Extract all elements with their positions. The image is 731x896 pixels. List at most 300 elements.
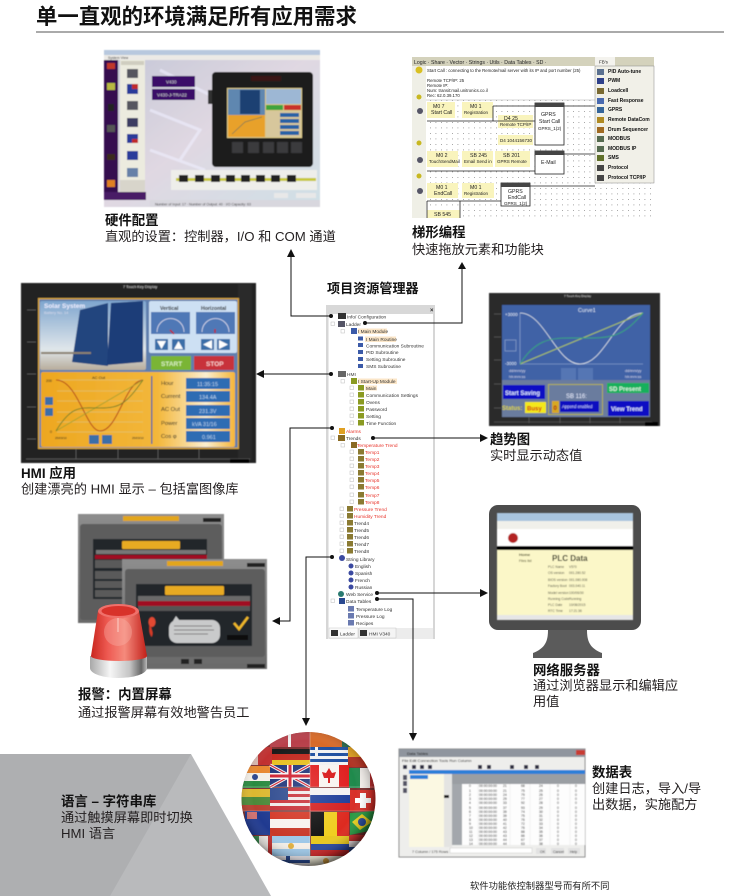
panel: ladder programming screenshot: PID Auto-tune [608, 69, 641, 75]
panel: ladder programming screenshot: Remote TCP/IP: 25 [427, 78, 465, 83]
panel: project explorer tree: Web Service [346, 592, 373, 598]
text: hardware configuration: 硬件配置 [105, 213, 159, 228]
panel: HMI application screenshot: 25/03/10 [55, 436, 67, 440]
panel: data tables screenshot: 00:00:00:00 [479, 842, 497, 846]
panel: ladder programming screenshot: TouchSendMail [429, 159, 460, 164]
panel: data tables screenshot: 6 [469, 810, 471, 814]
icon: monitor showing web server: BIOS version [548, 578, 568, 582]
screenshot: alarm history [78, 514, 224, 623]
panel: ladder programming screenshot: M0 7 [433, 104, 445, 110]
icon: monitor showing web server: 17:21:36 [569, 609, 582, 613]
panel: data tables screenshot: 29 [539, 806, 543, 810]
panel: data tables screenshot: 0 [557, 797, 559, 801]
panel: project explorer tree: String Library [346, 557, 375, 563]
panel: data tables screenshot: 0 [557, 814, 559, 818]
icon: monitor showing web server: Factory Boot [548, 584, 567, 588]
panel: trends screenshot: dd/mm/yy [625, 369, 642, 373]
panel: project explorer tree: Data Tables [346, 599, 372, 605]
panel: data tables screenshot: 0 [575, 797, 577, 801]
icon: monitor showing web server: Home [519, 552, 531, 557]
panel: HMI application screenshot: Current [161, 394, 181, 400]
panel: data tables screenshot: 72 [521, 822, 525, 826]
panel: ladder programming screenshot: Remote TCP/IP [500, 122, 531, 127]
panel: project explorer tree: English [355, 564, 371, 570]
panel: data tables screenshot: Help [570, 850, 577, 854]
panel: data tables screenshot: 00:00:00:00 [479, 818, 497, 822]
panel: data tables screenshot: 41 [503, 822, 507, 826]
panel: project explorer tree: Pressure Trend [354, 507, 387, 513]
panel: data tables screenshot: 25 [539, 789, 543, 793]
panel: data tables screenshot: Data Tables [407, 751, 428, 756]
panel: ladder programming screenshot: PWM [608, 78, 620, 84]
panel: HMI application screenshot: Vertical [160, 306, 179, 312]
panel: hardware configuration screenshot: V430-J-TRA22 [157, 92, 187, 98]
panel: HMI application screenshot: Cos φ [161, 434, 177, 440]
text: web server: 通过浏览器显示和编辑应 [533, 678, 678, 693]
panel: data tables screenshot: 0 [575, 826, 577, 830]
panel: data tables screenshot: 44 [503, 842, 507, 846]
panel: project explorer tree: Ladder [346, 322, 361, 328]
panel: ladder programming screenshot: Start Call : connecting to the Remote/mail server with its IP and port number (25) [427, 68, 581, 73]
text: data tables: 数据表 [592, 764, 633, 780]
panel: data tables screenshot: 00:00:00:00 [479, 838, 497, 842]
text: language string library: 通过触摸屏幕即时切换 [61, 810, 193, 825]
panel: data tables screenshot: 24 [539, 784, 543, 788]
panel: data tables screenshot: 7 [469, 814, 471, 818]
panel: ladder programming screenshot: D4 25 [504, 116, 518, 122]
panel: data tables screenshot: 4 [469, 801, 471, 805]
panel: data tables screenshot: 86 [521, 834, 525, 838]
panel: ladder programming screenshot: SB 201 [503, 153, 520, 159]
text: HMI applications: 创建漂亮的 HMI 显示 – 包括富图像库 [21, 480, 239, 496]
panel: data tables screenshot: 39 [503, 810, 507, 814]
panel: ladder programming screenshot: Rec: 62.0.39.170 [427, 93, 460, 98]
panel: trends screenshot: +3000 [505, 312, 518, 317]
panel: data tables screenshot: 0 [557, 801, 559, 805]
panel: data tables screenshot: 26 [539, 793, 543, 797]
panel: data tables screenshot: 0 [557, 842, 559, 846]
panel: HMI application screenshot: 0 [50, 430, 52, 434]
icon: monitor showing web server [489, 505, 641, 658]
icon: monitor showing web server: PLC Name [548, 565, 564, 569]
panel: ladder programming screenshot: GPRS [541, 112, 556, 118]
panel: ladder programming screenshot: Registration [464, 191, 489, 196]
panel: project explorer tree: Alarms [346, 429, 362, 435]
panel: ladder programming screenshot [412, 57, 654, 218]
panel: data tables screenshot: 0 [557, 793, 559, 797]
panel: project explorer tree: Trend6 [354, 535, 369, 541]
panel: data tables screenshot: 00:00:00:00 [479, 797, 497, 801]
panel: data tables screenshot: 1 [469, 789, 471, 793]
panel: data tables screenshot: 93 [521, 806, 525, 810]
panel: data tables screenshot: 44 [503, 838, 507, 842]
panel: project explorer tree: Trend5 [354, 528, 369, 534]
panel: data tables screenshot: 00:00:00:00 [479, 822, 497, 826]
panel: project explorer tree: Temp5 [365, 478, 380, 484]
panel: data tables screenshot: 14 [469, 842, 473, 846]
panel: data tables screenshot: 38 [539, 842, 543, 846]
panel: data tables screenshot: 00:00:00:00 [479, 793, 497, 797]
panel: data tables screenshot: 0 [575, 838, 577, 842]
panel: hardware configuration screenshot: System View [108, 56, 129, 60]
panel: data tables screenshot: 30 [539, 810, 543, 814]
panel: project explorer tree: HMI V340 [369, 632, 391, 638]
panel: project explorer tree: PID Subroutine [366, 350, 399, 356]
text: web server: 用值 [533, 694, 559, 709]
panel: HMI application screenshot: 231.3V [199, 409, 217, 415]
panel: data tables screenshot: 00:00:00:00 [479, 789, 497, 793]
panel: project explorer tree: Setting [366, 414, 381, 420]
icon: monitor showing web server: RTC Time [548, 609, 563, 613]
text: ladder programming: 梯形编程 [412, 224, 466, 240]
panel: project explorer tree: Temperature Log [356, 607, 393, 613]
panel: project explorer tree: Temp8 [365, 500, 380, 506]
panel: data tables screenshot: 34 [539, 826, 543, 830]
panel: project explorer tree: Main [366, 386, 377, 392]
panel: ladder programming screenshot: MODBUS [608, 136, 631, 142]
panel: trends screenshot: Status: [502, 406, 522, 412]
panel: project explorer tree: Temp2 [365, 457, 380, 463]
panel: project explorer tree: French [355, 578, 370, 584]
panel: project explorer tree: Temp4 [365, 471, 380, 477]
panel: project explorer tree: Trends [346, 436, 361, 442]
panel: ladder programming screenshot: Loadcell [608, 88, 629, 94]
panel: data tables screenshot: 0 [575, 810, 577, 814]
text: language string library [61, 793, 193, 841]
panel: ladder programming screenshot: MODBUS IP [608, 146, 637, 152]
icon: monitor showing web server: Running [569, 597, 581, 601]
panel: project explorer tree: Temp3 [365, 464, 380, 470]
panel: data tables screenshot: 0 [557, 822, 559, 826]
text: data tables: 创建日志，导入/导 [592, 781, 701, 796]
panel: ladder programming screenshot: Start Call [431, 110, 452, 116]
panel: hardware configuration screenshot: V430 [166, 80, 177, 84]
panel: data tables screenshot: 29 [503, 797, 507, 801]
panel: ladder programming screenshot: GPRS Remote [497, 159, 527, 164]
panel: data tables screenshot [399, 749, 585, 857]
panel: data tables screenshot: 0 [575, 842, 577, 846]
panel: hardware configuration screenshot: Number of Input: 17 · Number of Output: 40 · I/O Capacity: 63 [155, 202, 251, 206]
panel: data tables screenshot: 2 [469, 793, 471, 797]
icon: monitor showing web server: 10/08/2015 [569, 603, 586, 607]
text: ladder programming [412, 224, 544, 257]
panel: project explorer tree: Temp1 [365, 450, 380, 456]
icon: monitor showing web server: OS version [548, 571, 564, 575]
panel: ladder programming screenshot: D4 1044156730 [500, 138, 533, 143]
icon: monitor showing web server: 001.080.008 [569, 578, 588, 582]
panel: data tables screenshot: 0 [557, 789, 559, 793]
panel: project explorer tree: Ovens [366, 400, 380, 406]
panel: ladder programming screenshot: Num: transit:mail.unitronics.co.il [427, 88, 488, 93]
panel: data tables screenshot: 67 [521, 838, 525, 842]
panel: data tables screenshot: 37 [503, 806, 507, 810]
panel: ladder programming screenshot: FB's [599, 60, 609, 64]
icon: monitor showing web server: 001.280.52 [569, 571, 586, 575]
panel: data tables screenshot: 75 [521, 789, 525, 793]
panel: HMI application screenshot: Power [161, 421, 178, 427]
panel: data tables screenshot: 33 [503, 801, 507, 805]
panel: ladder programming screenshot: M0 1 [470, 185, 482, 191]
panel: trends screenshot: 7 Touch Key Display [564, 294, 592, 298]
panel: data tables screenshot: 28 [539, 801, 543, 805]
text: alarms [78, 686, 249, 720]
panel: project explorer tree: SMS Subroutine [366, 364, 401, 370]
panel: data tables screenshot: 33 [539, 822, 543, 826]
panel: project explorer tree: Trend7 [354, 542, 369, 548]
icon: monitor showing web server: Files list [519, 559, 532, 563]
panel: ladder programming screenshot: M0 1 [436, 185, 448, 191]
panel: data tables screenshot: 0 [557, 818, 559, 822]
panel: ladder programming screenshot: E-Mail [541, 160, 556, 166]
panel: data tables screenshot: 0 [575, 784, 577, 788]
heading: project explorer: 项目资源管理器 [327, 280, 419, 296]
panel: HMI application screenshot: 11:35:15 [197, 382, 218, 388]
arrow: web service to web server [375, 589, 488, 597]
panel: data tables screenshot: 74 [521, 810, 525, 814]
panel: ladder programming screenshot: GPRS [608, 107, 623, 113]
panel: ladder programming screenshot: EndCall [508, 195, 526, 201]
panel: data tables screenshot: 0 [575, 806, 577, 810]
panel: ladder programming screenshot: Protocol TCP/IP [608, 175, 646, 181]
arrow: HMI to HMI application [256, 370, 333, 378]
panel: project explorer tree: Trend4 [354, 521, 369, 527]
panel: data tables screenshot: 0 [575, 789, 577, 793]
panel: data tables screenshot: 0 [557, 830, 559, 834]
panel: data tables screenshot: 0 [575, 793, 577, 797]
panel: data tables screenshot: 0 [557, 826, 559, 830]
panel: data tables screenshot: 00:00:00:00 [479, 810, 497, 814]
arrow: trends to trend screen [371, 434, 488, 442]
panel: project explorer tree: Pressure Log [356, 614, 385, 620]
text: language string library: HMI 语言 [61, 826, 115, 841]
screenshot: active alarm [122, 559, 267, 669]
panel: data tables screenshot: 76 [521, 826, 525, 830]
arrow: string library to globe [302, 555, 334, 726]
panel: data tables screenshot: 0 [557, 784, 559, 788]
panel: trends screenshot: hh:mm:ss [625, 375, 642, 379]
panel: data tables screenshot: 68 [521, 784, 525, 788]
panel: trends screenshot: -3000 [505, 361, 517, 366]
panel: data tables screenshot: 40 [503, 818, 507, 822]
text: language string library: 语言 – 字符串库 [61, 793, 156, 809]
arrow: info configuration to hardware [287, 249, 333, 318]
icon: monitor showing web server: Model version [548, 591, 569, 595]
panel: trends screenshot: Start Saving [505, 391, 540, 397]
panel: project explorer tree: I Main Routine [366, 337, 397, 343]
panel: data tables screenshot: 92 [521, 801, 525, 805]
panel: ladder programming screenshot: SB 245 [470, 153, 487, 159]
panel: data tables screenshot: 0 [575, 814, 577, 818]
text: web server [533, 662, 678, 709]
panel: ladder programming screenshot: Protocol [608, 165, 629, 171]
panel: ladder programming screenshot: Remote IP: [427, 83, 448, 88]
panel: ladder programming screenshot: Remote DataCom [608, 117, 650, 123]
panel: data tables screenshot: 00:00:00:00 [479, 801, 497, 805]
text: data tables: 出数据，实施配方 [592, 797, 698, 812]
panel: data tables screenshot: 0 [557, 806, 559, 810]
icon: monitor showing web server: PLC Data [552, 554, 588, 563]
panel: data tables screenshot: 11 [469, 830, 473, 834]
panel: data tables screenshot: 75 [521, 814, 525, 818]
text: alarms: 报警：内置屏幕 [78, 686, 172, 702]
text: trends [490, 432, 582, 463]
panel: data tables screenshot: 27 [539, 797, 543, 801]
background shape: grey band [0, 754, 271, 896]
icon: monitor showing web server: 100/06/30 [569, 591, 584, 595]
panel: data tables screenshot: 21 [503, 789, 507, 793]
panel: project explorer tree: Ladder [340, 632, 355, 638]
panel: project explorer tree: Humidity Trend [354, 514, 387, 520]
text: trends: 趋势图 [490, 432, 530, 447]
panel: project explorer tree: Info/ Configuration [347, 314, 387, 320]
panel: data tables screenshot: 0 [575, 830, 577, 834]
panel: ladder programming screenshot: EndCall [434, 191, 452, 197]
panel: ladder programming screenshot: GPRS [508, 189, 523, 195]
panel: project explorer tree: I Start-Up Module [358, 379, 396, 385]
panel: HMI application screenshot: AC Out [161, 407, 180, 413]
panel: data tables screenshot: 00:00:00:00 [479, 834, 497, 838]
panel: trends screenshot: hh:mm:ss [509, 375, 526, 379]
panel: data tables screenshot: 0 [575, 801, 577, 805]
panel: trends screenshot: SD Present [609, 387, 641, 393]
icon: monitor showing web server: Running Code [548, 597, 569, 601]
panel: trends screenshot: Append enabled [562, 404, 593, 409]
panel: data tables screenshot: 13 [469, 838, 473, 842]
panel: project explorer tree: Temperature Trend [357, 443, 398, 449]
panel: ladder programming screenshot: M0 1 [470, 104, 482, 110]
panel: HMI application screenshot: 0.961 [202, 435, 216, 441]
panel: HMI application screenshot: AC Out [92, 375, 106, 380]
panel: data tables screenshot: 00:00:00:00 [479, 784, 497, 788]
panel: data tables screenshot: 39 [503, 814, 507, 818]
panel: ladder programming screenshot: SB 545 [434, 212, 451, 218]
text: web server: 网络服务器 [533, 662, 601, 678]
panel: HMI application screenshot: START [161, 361, 182, 368]
panel: data tables screenshot: 42 [503, 826, 507, 830]
panel: data tables screenshot: 31 [539, 814, 543, 818]
panel: data tables screenshot: 36 [539, 834, 543, 838]
panel: project explorer tree: Russian [355, 585, 373, 591]
panel: data tables screenshot: 0 [575, 818, 577, 822]
panel: data tables screenshot: Cancel [553, 850, 564, 854]
panel: data tables screenshot: 77 [521, 797, 525, 801]
icon: monitor showing web server: V570 [569, 565, 577, 569]
panel: HMI application screenshot: Hour [161, 381, 174, 387]
panel: trends screenshot: dd/mm/yy [509, 369, 526, 373]
panel: data tables screenshot: 0 [557, 834, 559, 838]
panel: data tables screenshot: 00:00:00:00 [479, 814, 497, 818]
panel: trends screenshot: SB 116: [566, 394, 587, 400]
text: data tables [592, 764, 701, 812]
panel: ladder programming screenshot: Email Send in [464, 159, 492, 164]
panel: trends screenshot: 0 [554, 406, 558, 412]
text: hardware configuration: 直观的设置：控制器，I/O 和 COM 通道 [105, 229, 336, 244]
panel: trends screenshot: View Trend [611, 407, 643, 413]
text: trends: 实时显示动态值 [490, 448, 582, 463]
panel: HMI application screenshot: 200 [46, 379, 52, 383]
panel: trends screenshot: Busy [527, 406, 542, 412]
panel: ladder programming screenshot: Start Call [539, 119, 560, 125]
text: HMI applications [21, 465, 239, 496]
panel: project explorer tree: Spanish [355, 571, 373, 577]
panel: ladder programming screenshot: Logic · Share · Vector · Strings · Utils · Data Tables · SD · [414, 60, 547, 66]
panel: project explorer tree: Communication Subroutine [366, 344, 424, 350]
panel: project explorer tree: Trend8 [354, 549, 369, 555]
text: alarms: 通过报警屏幕有效地警告员工 [78, 705, 249, 720]
panel: data tables screenshot: 7 Column / 175 Rows [412, 850, 448, 854]
panel: HMI application screenshot: 25/03/10 [132, 436, 144, 440]
footnote: 软件功能依控制器型号而有所不同 [470, 880, 609, 891]
panel: ladder programming screenshot: Drum Sequencer [608, 127, 648, 133]
panel: data tables screenshot: File Edit Connection Tools Run Column [402, 758, 472, 763]
panel: data tables screenshot: 76 [521, 818, 525, 822]
panel: hardware configuration screenshot [104, 50, 320, 207]
panel: data tables screenshot: 35 [539, 830, 543, 834]
panel: ladder programming screenshot: M0 2 [436, 153, 448, 159]
arrow: alarms to alarm screens [272, 426, 334, 625]
panel: data tables screenshot: 8 [469, 818, 471, 822]
panel: HMI application screenshot: Battery No. 14 [44, 311, 68, 315]
icon: monitor showing web server: 003.040.11 [569, 584, 585, 588]
panel: ladder programming screenshot: Registration [464, 110, 489, 115]
panel: project explorer tree: Setting Subroutine [366, 357, 406, 363]
panel: trends screenshot [489, 293, 660, 426]
panel: project explorer tree: × [430, 308, 434, 314]
panel: data tables screenshot: 9 [469, 822, 471, 826]
panel: project explorer tree: Password [366, 407, 387, 413]
panel: ladder programming screenshot: GPRS_1(2) [538, 126, 562, 131]
panel: data tables screenshot: 79 [521, 793, 525, 797]
text: hardware configuration [105, 213, 336, 244]
panel: project explorer tree: Temp7 [365, 493, 380, 499]
panel: project explorer tree: Recipes [356, 621, 374, 627]
text: HMI applications: HMI 应用 [21, 465, 76, 481]
panel: HMI application screenshot: STOP [206, 361, 224, 368]
panel: data tables screenshot: 00:00:00:00 [479, 806, 497, 810]
panel: data tables screenshot: 37 [539, 838, 543, 842]
icon: globe of flags [240, 732, 378, 868]
panel: data tables screenshot: OK [540, 850, 546, 854]
title: 单一直观的环境满足所有应用需求 [36, 4, 357, 29]
panel: data tables screenshot: 0 [557, 838, 559, 842]
panel: HMI application screenshot: Horizontal [201, 306, 227, 312]
panel: project explorer tree: Time Function [366, 421, 397, 427]
text: ladder programming: 快速拖放元素和功能块 [412, 242, 544, 257]
panel: ladder programming screenshot: Fast Response [608, 98, 644, 104]
panel: data tables screenshot: 00:00:00:00 [479, 826, 497, 830]
panel: data tables screenshot: 0 [575, 822, 577, 826]
panel: project explorer tree [326, 305, 435, 641]
panel: ladder programming screenshot: GPRS_1(2) [504, 201, 528, 206]
panel: data tables screenshot: 0 [469, 784, 471, 788]
panel: data tables screenshot: 21 [503, 784, 507, 788]
panel: alarm screens with red beacon [78, 514, 267, 678]
icon: red alarm beacon [90, 604, 147, 678]
panel: data tables screenshot: 43 [503, 834, 507, 838]
panel: project explorer tree: Temp6 [365, 485, 380, 491]
panel: project explorer tree: I Main Module [358, 329, 388, 335]
panel: data tables screenshot: 5 [469, 806, 471, 810]
panel: data tables screenshot: 43 [503, 830, 507, 834]
panel: ladder programming screenshot: SMS [608, 155, 620, 161]
panel: data tables screenshot: 88 [521, 830, 525, 834]
panel: data tables screenshot: 10 [469, 826, 473, 830]
panel: HMI application screenshot [21, 283, 256, 463]
panel: data tables screenshot: 32 [539, 818, 543, 822]
panel: data tables screenshot: 0 [557, 810, 559, 814]
panel: HMI application screenshot: Solar System [44, 303, 85, 310]
panel: HMI application screenshot: 7 Touch Key Display [123, 285, 157, 289]
